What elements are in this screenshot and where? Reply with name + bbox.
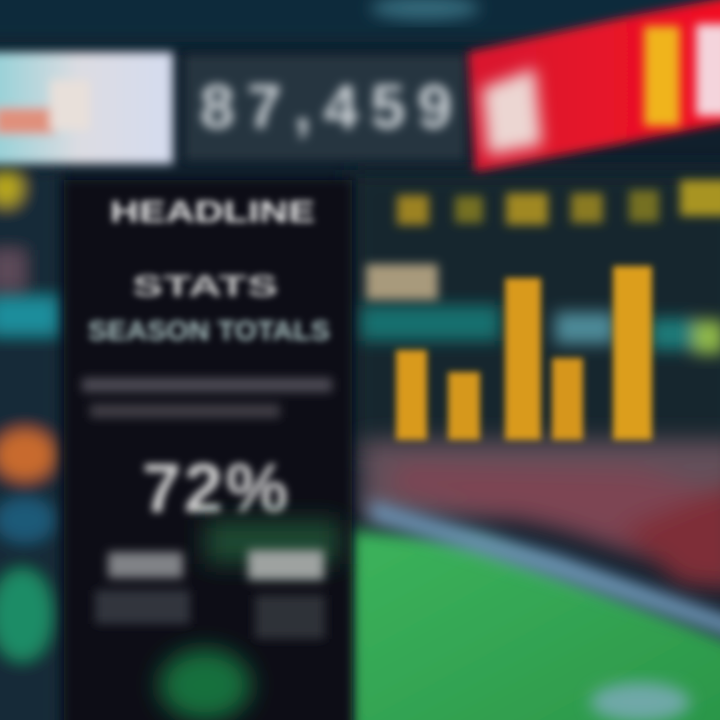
body text — [82, 378, 332, 418]
green accent — [159, 520, 340, 720]
top banner: pale panel — [0, 52, 173, 164]
lower stat right — [248, 550, 325, 639]
top banner: middle panel — [185, 55, 465, 160]
stadium crowd — [360, 440, 720, 590]
highlighted line: SEASON TOTALS — [88, 315, 330, 346]
subheading: STATS — [132, 270, 278, 303]
left edge stadium strip — [0, 170, 60, 720]
top banner: middle panel: 87,459 — [200, 73, 452, 142]
left dark panel — [64, 180, 352, 720]
top banner: red panel — [468, 0, 720, 172]
heading: HEADLINE — [110, 194, 315, 229]
stadium pitch — [350, 500, 720, 720]
chart top labels — [397, 180, 720, 225]
lower stat left — [95, 552, 190, 624]
bar chart — [396, 266, 652, 440]
chart callout label — [366, 264, 438, 300]
big percentage: 72% — [142, 449, 288, 527]
teal band — [360, 305, 720, 354]
